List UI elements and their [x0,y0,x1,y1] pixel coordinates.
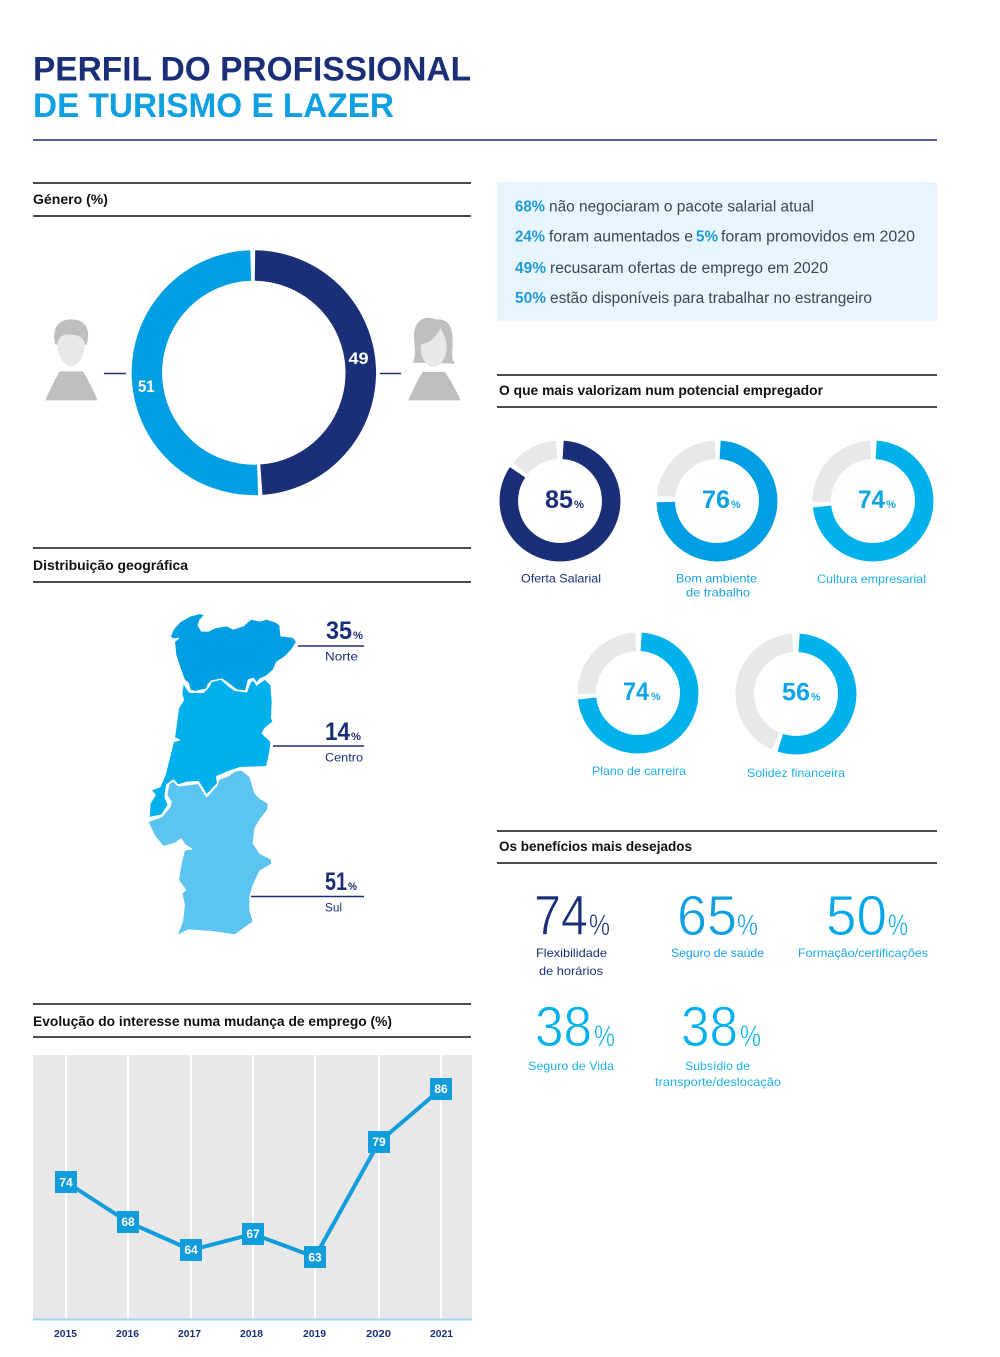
benefit: formação 50: 50 [826,884,887,948]
line chart: evolução do interesse: 2017 [178,1328,201,1340]
map label: Sul [251,868,364,914]
line chart: evolução do interesse: 64 [184,1243,198,1257]
map label: Centro: 14 [325,718,350,746]
ring: plano de carreira 74 [587,642,689,778]
line chart: evolução do interesse: 74 [59,1176,73,1190]
panel: key facts [497,182,937,321]
ring: solidez financeira 56 [745,643,847,780]
benefit: seguro de vida 38: 38 [535,995,592,1059]
line chart: evolução do interesse: 63 [308,1250,322,1264]
line chart: evolução do interesse [33,1055,472,1340]
fact: pacote salarial: 68% [515,198,545,216]
ring: solidez financeira 56: % [811,692,821,704]
ring: plano de carreira 74: Plano de carreira [592,764,686,778]
benefit: flexibilidade 74: Flexibilidade [536,946,607,960]
benefit: seguro de saúde 65: Seguro de saúde [671,946,764,960]
line chart: evolução do interesse: 2018 [240,1328,263,1340]
heading: o que mais valorizam: O que mais valorizam num potencial empregador [499,383,824,398]
ring: oferta salarial 85: 85 [545,486,573,514]
region: Centro [149,679,273,818]
heading: distribuição geográfica: Distribuição geográfica [33,558,188,573]
ring: bom ambiente 76: Bom ambiente [676,572,757,586]
heading: género: Género (%) [33,192,108,207]
title: PERFIL DO PROFISSIONAL [33,50,471,88]
line chart: evolução do interesse: 2019 [303,1328,326,1340]
benefit: formação 50 [798,884,928,960]
line chart: evolução do interesse: 2015 [54,1328,77,1340]
icon: male person [45,319,97,400]
benefit: seguro de saúde 65: 65 [677,884,737,948]
line chart: evolução do interesse: 86 [434,1082,448,1096]
ring: oferta salarial 85: Oferta Salarial [521,572,601,586]
ring: plano de carreira 74: 74 [623,678,649,706]
benefit: subsídio de transporte 38: % [740,1020,761,1053]
icon: female person [408,318,461,400]
benefit: seguro de vida 38: % [594,1020,615,1053]
ring: cultura empresarial 74: Cultura empresarial [817,572,926,586]
map: Portugal [148,613,297,936]
map label: Sul: 51 [325,868,347,896]
ring: solidez financeira 56: 56 [782,678,810,706]
benefit: flexibilidade 74: de horários [539,964,603,978]
title [33,50,471,125]
fact: aumentados e promovidos: foram promovidos em 2020 [721,228,915,246]
segment: mulheres 49 [255,266,361,480]
benefit: subsídio de transporte 38 [655,995,781,1089]
map label: Centro: Centro [325,750,363,764]
line chart: evolução do interesse: 68 [121,1215,135,1229]
map label: Norte: % [353,630,363,642]
line chart: evolução do interesse: 79 [372,1135,386,1149]
ring: oferta salarial 85: % [574,499,584,511]
fact: aumentados e promovidos: foram aumentados e [549,228,693,246]
ring: oferta salarial 85 [509,450,611,586]
map label: Centro: % [351,731,361,743]
fact: ofertas recusadas: 49% [515,260,546,277]
line chart: evolução do interesse: 2021 [430,1328,453,1340]
ring: cultura empresarial 74 [817,450,926,586]
ring: plano de carreira 74: % [651,691,661,703]
benefit: subsídio de transporte 38: Subsídio de [685,1059,750,1073]
connector: male [104,372,126,374]
benefit: seguro de saúde 65: % [737,909,758,942]
segment: homens 51 [147,266,258,480]
ring: bom ambiente 76: % [731,499,741,511]
region: Norte [170,613,297,692]
benefit: flexibilidade 74: % [589,909,610,942]
donut chart: género [138,266,368,480]
value: 49: 49 [348,349,368,368]
benefit: seguro de vida 38 [528,995,615,1073]
connector: female [380,372,401,374]
map label: Norte: 35 [326,617,352,645]
fact: estrangeiro: estão disponíveis para trabalhar no estrangeiro [550,290,872,307]
fact: aumentados e promovidos: 24% [515,228,545,246]
benefit: formação 50: % [888,909,908,942]
fact: aumentados e promovidos [515,228,915,246]
map label: Sul: Sul [325,900,342,914]
fact: aumentados e promovidos: 5% [696,228,718,246]
map label: Norte [298,617,364,664]
line chart: evolução do interesse: 2016 [116,1328,139,1340]
value: 51: 51 [138,377,154,396]
ring: solidez financeira 56: Solidez financeira [747,766,845,780]
map label: Sul: % [348,881,357,893]
fact: ofertas recusadas: recusaram ofertas de emprego em 2020 [550,260,828,277]
benefit: flexibilidade 74: 74 [534,884,588,948]
heading: benefícios: Os benefícios mais desejados [499,839,692,854]
ring: cultura empresarial 74: % [886,499,896,511]
benefit: subsídio de transporte 38: transporte/deslocação [655,1075,781,1089]
fact: estrangeiro: 50% [515,290,546,307]
title: DE TURISMO E LAZER [33,87,394,125]
fact: pacote salarial: não negociaram o pacote salarial atual [549,198,814,216]
heading: evolução do interesse: Evolução do interesse numa mudança de emprego (%) [33,1014,392,1029]
map label: Norte: Norte [325,650,358,664]
map label: Centro [273,718,364,764]
ring: bom ambiente 76 [666,450,768,600]
benefit: seguro de saúde 65 [671,884,764,960]
ring: bom ambiente 76: de trabalho [686,586,750,600]
line chart: evolução do interesse: 2020 [366,1328,391,1340]
ring: cultura empresarial 74: 74 [858,486,885,514]
benefit: flexibilidade 74 [534,884,610,978]
line chart: evolução do interesse: 67 [246,1227,260,1241]
region: Sul [148,770,272,936]
ring: bom ambiente 76: 76 [702,486,730,514]
benefit: formação 50: Formação/certificações [798,946,928,960]
benefit: seguro de vida 38: Seguro de Vida [528,1059,614,1073]
benefit: subsídio de transporte 38: 38 [681,995,738,1059]
